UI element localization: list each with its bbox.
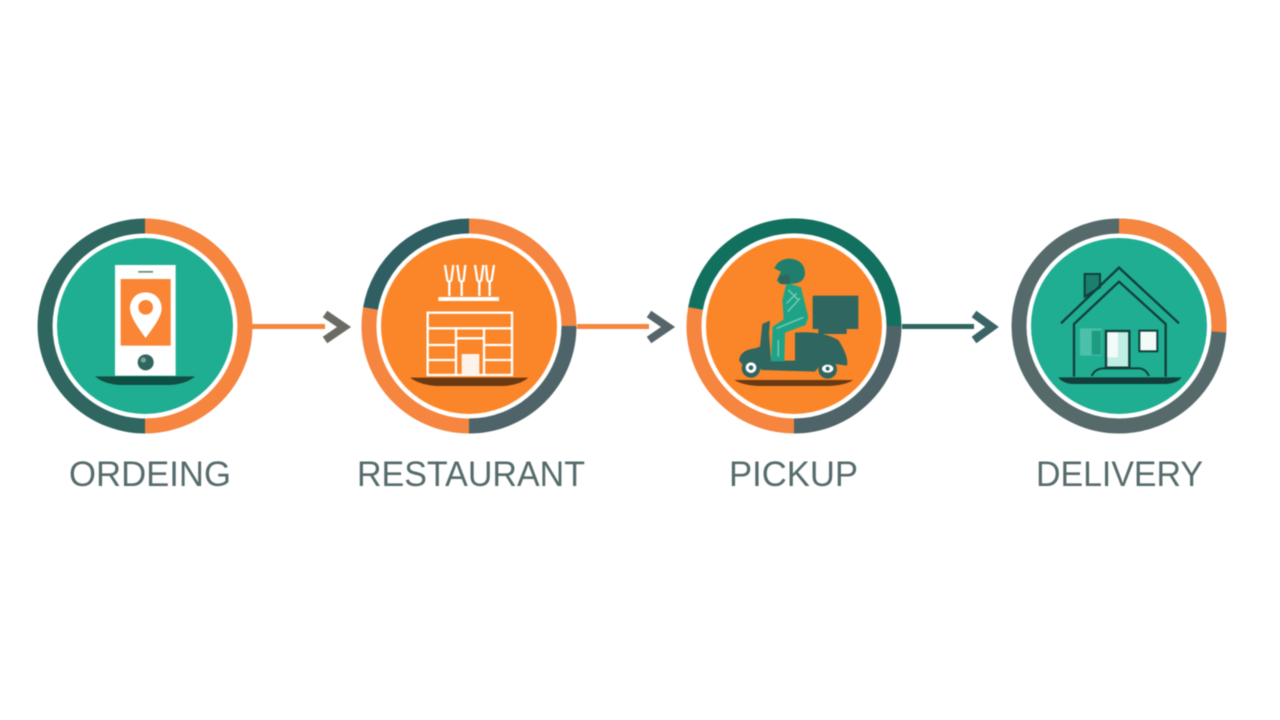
- label: pickup: PICKUP: [729, 455, 858, 494]
- disc: delivery: [1031, 238, 1207, 414]
- icon: phone with location pin: [95, 265, 195, 385]
- disc: pickup: [706, 238, 882, 414]
- arrow: restaurant to pickup: [577, 314, 668, 340]
- ring: restaurant: [369, 226, 569, 426]
- step: pickup: [694, 226, 894, 494]
- disc: ordering: [57, 238, 233, 414]
- label: ordering: ORDEING: [69, 455, 231, 494]
- icon: house: [1058, 268, 1182, 384]
- building facade: [428, 313, 512, 375]
- arrow: pickup to delivery: [902, 314, 992, 340]
- label: restaurant: RESTAURANT: [357, 455, 585, 494]
- icon: courier on scooter: [734, 259, 858, 386]
- step: delivery: [1019, 226, 1219, 494]
- label: delivery: DELIVERY: [1036, 455, 1203, 494]
- ring: ordering: [45, 226, 245, 426]
- icon: restaurant building: [410, 265, 528, 386]
- glasses on shelf: [438, 265, 499, 299]
- step: ordering: [45, 226, 245, 494]
- ring: pickup: [694, 226, 894, 426]
- arrow: ordering to restaurant: [252, 314, 344, 340]
- step: restaurant: [357, 226, 585, 494]
- ring: delivery: [1019, 226, 1219, 426]
- disc: restaurant: [381, 238, 557, 414]
